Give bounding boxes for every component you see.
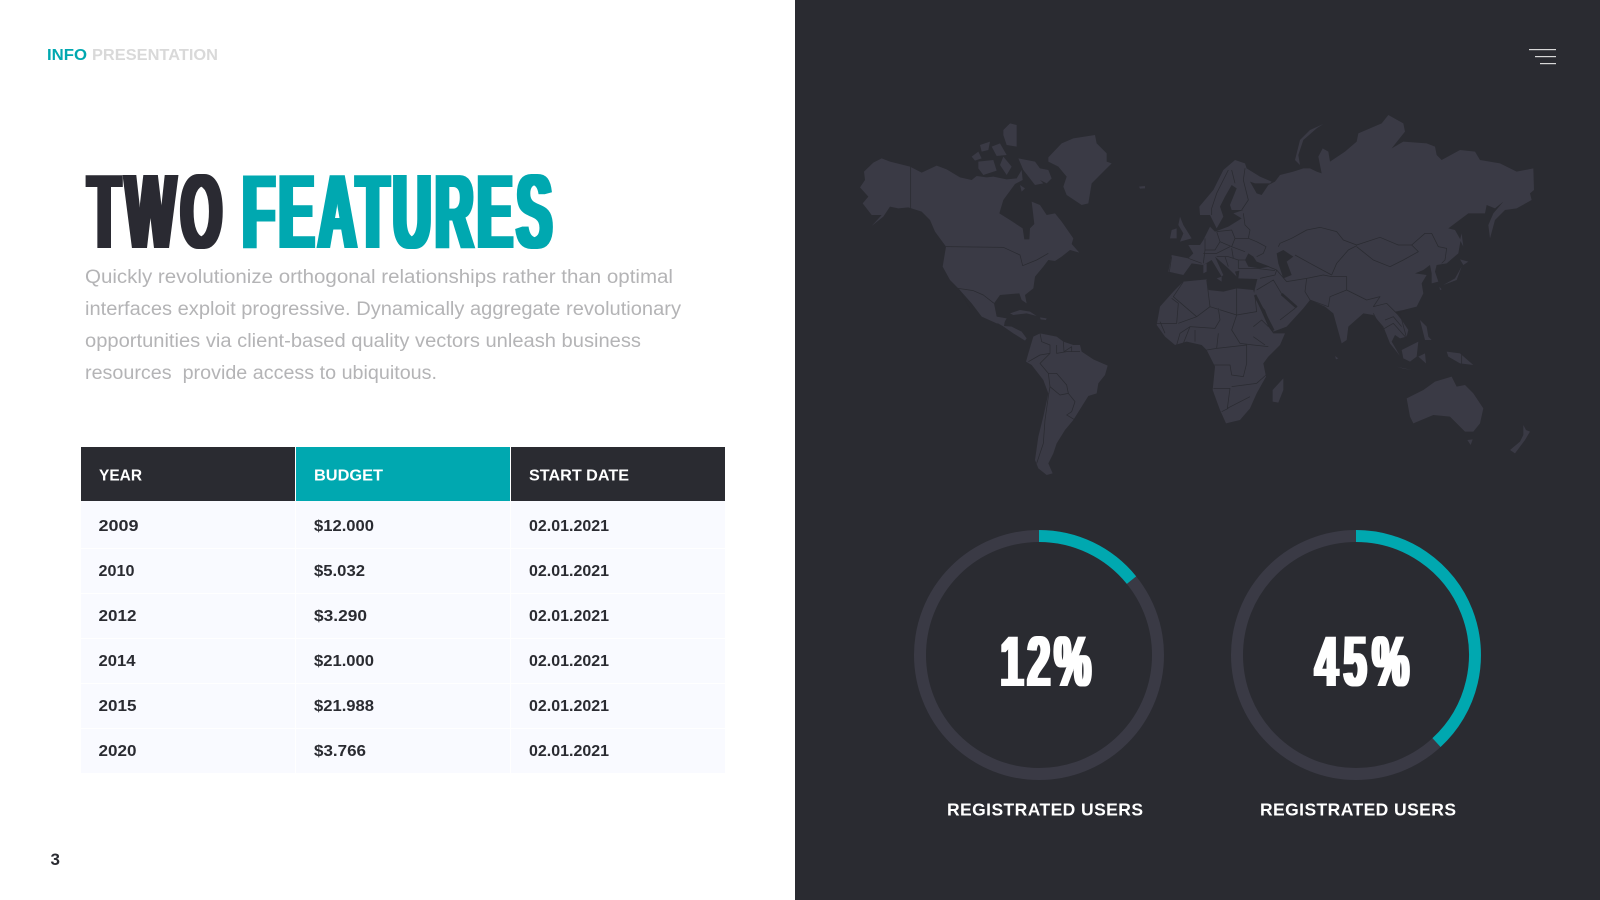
body paragraph: opportunities via client-based quality vectors unleash business: [85, 331, 641, 352]
panel: left white background: [0, 0, 795, 900]
world map: [860, 115, 1534, 475]
chart label: registrated users 1: REGISTRATED USERS: [947, 800, 1143, 820]
table header: START DATE: [529, 468, 629, 484]
brand header: PRESENTATION: [92, 47, 218, 64]
panel: right dark background: [795, 0, 1600, 900]
table rows: $21.988: [314, 698, 374, 715]
table rows: 02.01.2021: [529, 698, 609, 715]
table header: YEAR: [99, 468, 142, 484]
donut chart: 45%: 45%: [1315, 622, 1409, 702]
table rows: 2012: [98, 608, 137, 625]
table rows: 2009: [98, 518, 139, 535]
table rows: 2020: [98, 743, 137, 760]
body paragraph: Quickly revolutionize orthogonal relationships rather than optimal: [85, 267, 673, 288]
table rows: $12.000: [314, 518, 374, 535]
table rows: $21.000: [314, 653, 374, 670]
title: [88, 152, 552, 271]
donut chart: 12%: [920, 536, 1158, 774]
body paragraph: [85, 267, 682, 384]
table rows: 02.01.2021: [529, 743, 609, 760]
page number: 3: [50, 850, 60, 869]
table rows: 02.01.2021: [529, 608, 609, 625]
table header: [81, 447, 725, 501]
icon: hamburger menu: [1529, 49, 1556, 64]
table header: BUDGET: [314, 468, 383, 484]
table rows: 02.01.2021: [529, 518, 609, 535]
body paragraph: interfaces exploit progressive. Dynamically aggregate revolutionary: [85, 299, 682, 320]
table rows: $3.766: [314, 743, 366, 760]
body paragraph: resources provide access to ubiquitous.: [85, 363, 437, 384]
table rows: $3.290: [314, 608, 367, 625]
table rows: 2015: [98, 698, 137, 715]
table rows: 02.01.2021: [529, 653, 609, 670]
title: FEATURES: [242, 152, 552, 271]
donut chart: 12%: 12%: [1000, 622, 1091, 702]
table rows: 2014: [98, 653, 136, 670]
table rows: 2010: [98, 563, 135, 580]
chart label: registrated users 2: REGISTRATED USERS: [1260, 800, 1456, 820]
table rows: [81, 501, 725, 773]
map: Eurasia, Africa and Oceania: [1157, 115, 1534, 453]
table: [81, 447, 725, 773]
map: Americas: [860, 123, 1145, 475]
table rows: 02.01.2021: [529, 563, 609, 580]
table rows: $5.032: [314, 563, 365, 580]
brand header: INFO: [47, 47, 87, 64]
title: TWO: [88, 152, 222, 271]
donut chart: 45%: [1237, 536, 1475, 774]
